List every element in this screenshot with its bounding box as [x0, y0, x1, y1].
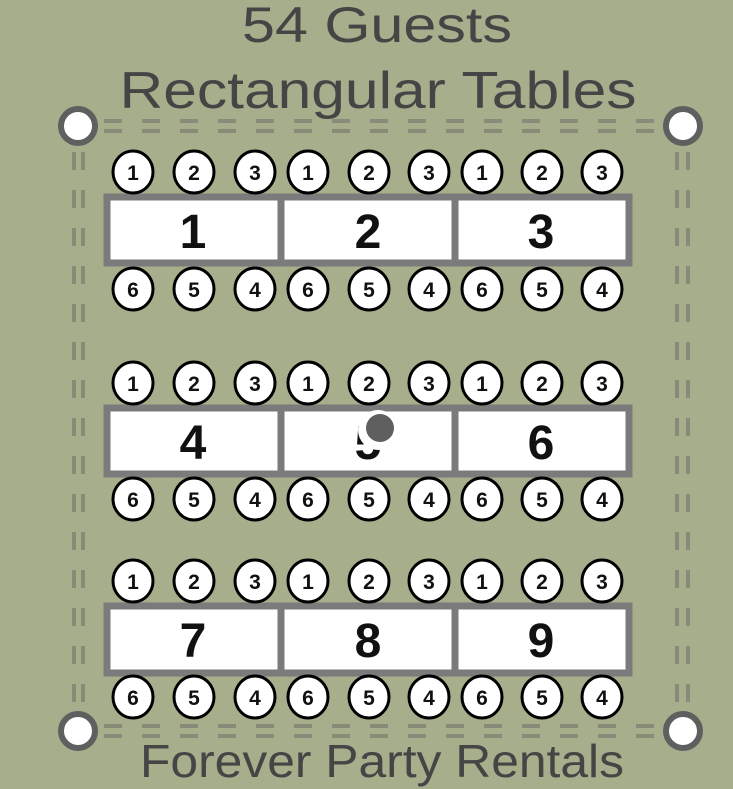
- chair numbers: 4: [249, 279, 261, 302]
- chair numbers: 5: [536, 489, 548, 512]
- table row 1: 3: [528, 206, 554, 259]
- chair numbers: 3: [249, 373, 261, 396]
- chair numbers: [127, 162, 608, 710]
- chair numbers: 2: [536, 162, 548, 185]
- chair numbers: 2: [188, 162, 200, 185]
- chair numbers: 3: [596, 162, 608, 185]
- chair numbers: 6: [127, 489, 139, 512]
- chair numbers: 6: [302, 279, 314, 302]
- table row 2: [107, 408, 629, 474]
- chair numbers: 3: [249, 571, 261, 594]
- table row 1: 1: [180, 206, 206, 259]
- chair numbers: 6: [302, 489, 314, 512]
- chair numbers: 3: [249, 162, 261, 185]
- chair numbers: 1: [127, 571, 139, 594]
- chair numbers: 2: [363, 373, 375, 396]
- table row 2: 6: [528, 417, 554, 470]
- chair numbers: 1: [476, 373, 488, 396]
- table row 3: 9: [528, 615, 554, 668]
- chairs: [113, 151, 622, 718]
- chair numbers: 1: [302, 571, 314, 594]
- chair numbers: 6: [127, 279, 139, 302]
- chair numbers: 1: [127, 373, 139, 396]
- chair numbers: 2: [536, 571, 548, 594]
- chair numbers: 1: [302, 162, 314, 185]
- chair numbers: 4: [423, 687, 435, 710]
- frame: corner handles: [61, 109, 700, 748]
- chair numbers: 4: [249, 489, 261, 512]
- chair numbers: 6: [127, 687, 139, 710]
- chair numbers: 6: [476, 489, 488, 512]
- chair numbers: 1: [127, 162, 139, 185]
- chair numbers: 3: [423, 162, 435, 185]
- chair numbers: 5: [363, 687, 375, 710]
- chair numbers: 4: [596, 687, 608, 710]
- chair numbers: 4: [249, 687, 261, 710]
- chair numbers: 3: [596, 373, 608, 396]
- title: Rectangular Tables: [120, 62, 636, 120]
- table row 3: 8: [355, 615, 381, 668]
- table row 3: 7: [180, 615, 206, 668]
- chair numbers: 5: [363, 489, 375, 512]
- chair numbers: 4: [423, 279, 435, 302]
- table row 2: 4: [180, 417, 207, 470]
- chair numbers: 2: [363, 162, 375, 185]
- chair numbers: 5: [188, 489, 200, 512]
- chair numbers: 5: [536, 687, 548, 710]
- chair numbers: 6: [476, 687, 488, 710]
- chair numbers: 1: [476, 571, 488, 594]
- chair numbers: 4: [596, 489, 608, 512]
- chair numbers: 4: [596, 279, 608, 302]
- chair numbers: 2: [536, 373, 548, 396]
- marker dot: [358, 410, 398, 450]
- chair numbers: 2: [188, 571, 200, 594]
- chair numbers: 2: [188, 373, 200, 396]
- chair numbers: 4: [423, 489, 435, 512]
- chair numbers: 1: [476, 162, 488, 185]
- chair numbers: 6: [476, 279, 488, 302]
- chair numbers: 3: [423, 571, 435, 594]
- chair numbers: 5: [363, 279, 375, 302]
- chair numbers: 6: [302, 687, 314, 710]
- footer: company name: Forever Party Rentals: [140, 735, 624, 787]
- chair numbers: 2: [363, 571, 375, 594]
- title: [120, 0, 636, 120]
- chair numbers: 5: [536, 279, 548, 302]
- chair numbers: 5: [188, 687, 200, 710]
- frame: dashed border: [74, 121, 688, 736]
- table row 3: [107, 606, 629, 673]
- chair numbers: 5: [188, 279, 200, 302]
- chair numbers: 3: [596, 571, 608, 594]
- chair numbers: 3: [423, 373, 435, 396]
- table row 2: 5: [355, 417, 381, 470]
- table row 1: 2: [355, 206, 381, 259]
- chair numbers: 1: [302, 373, 314, 396]
- table row 1: [107, 197, 629, 263]
